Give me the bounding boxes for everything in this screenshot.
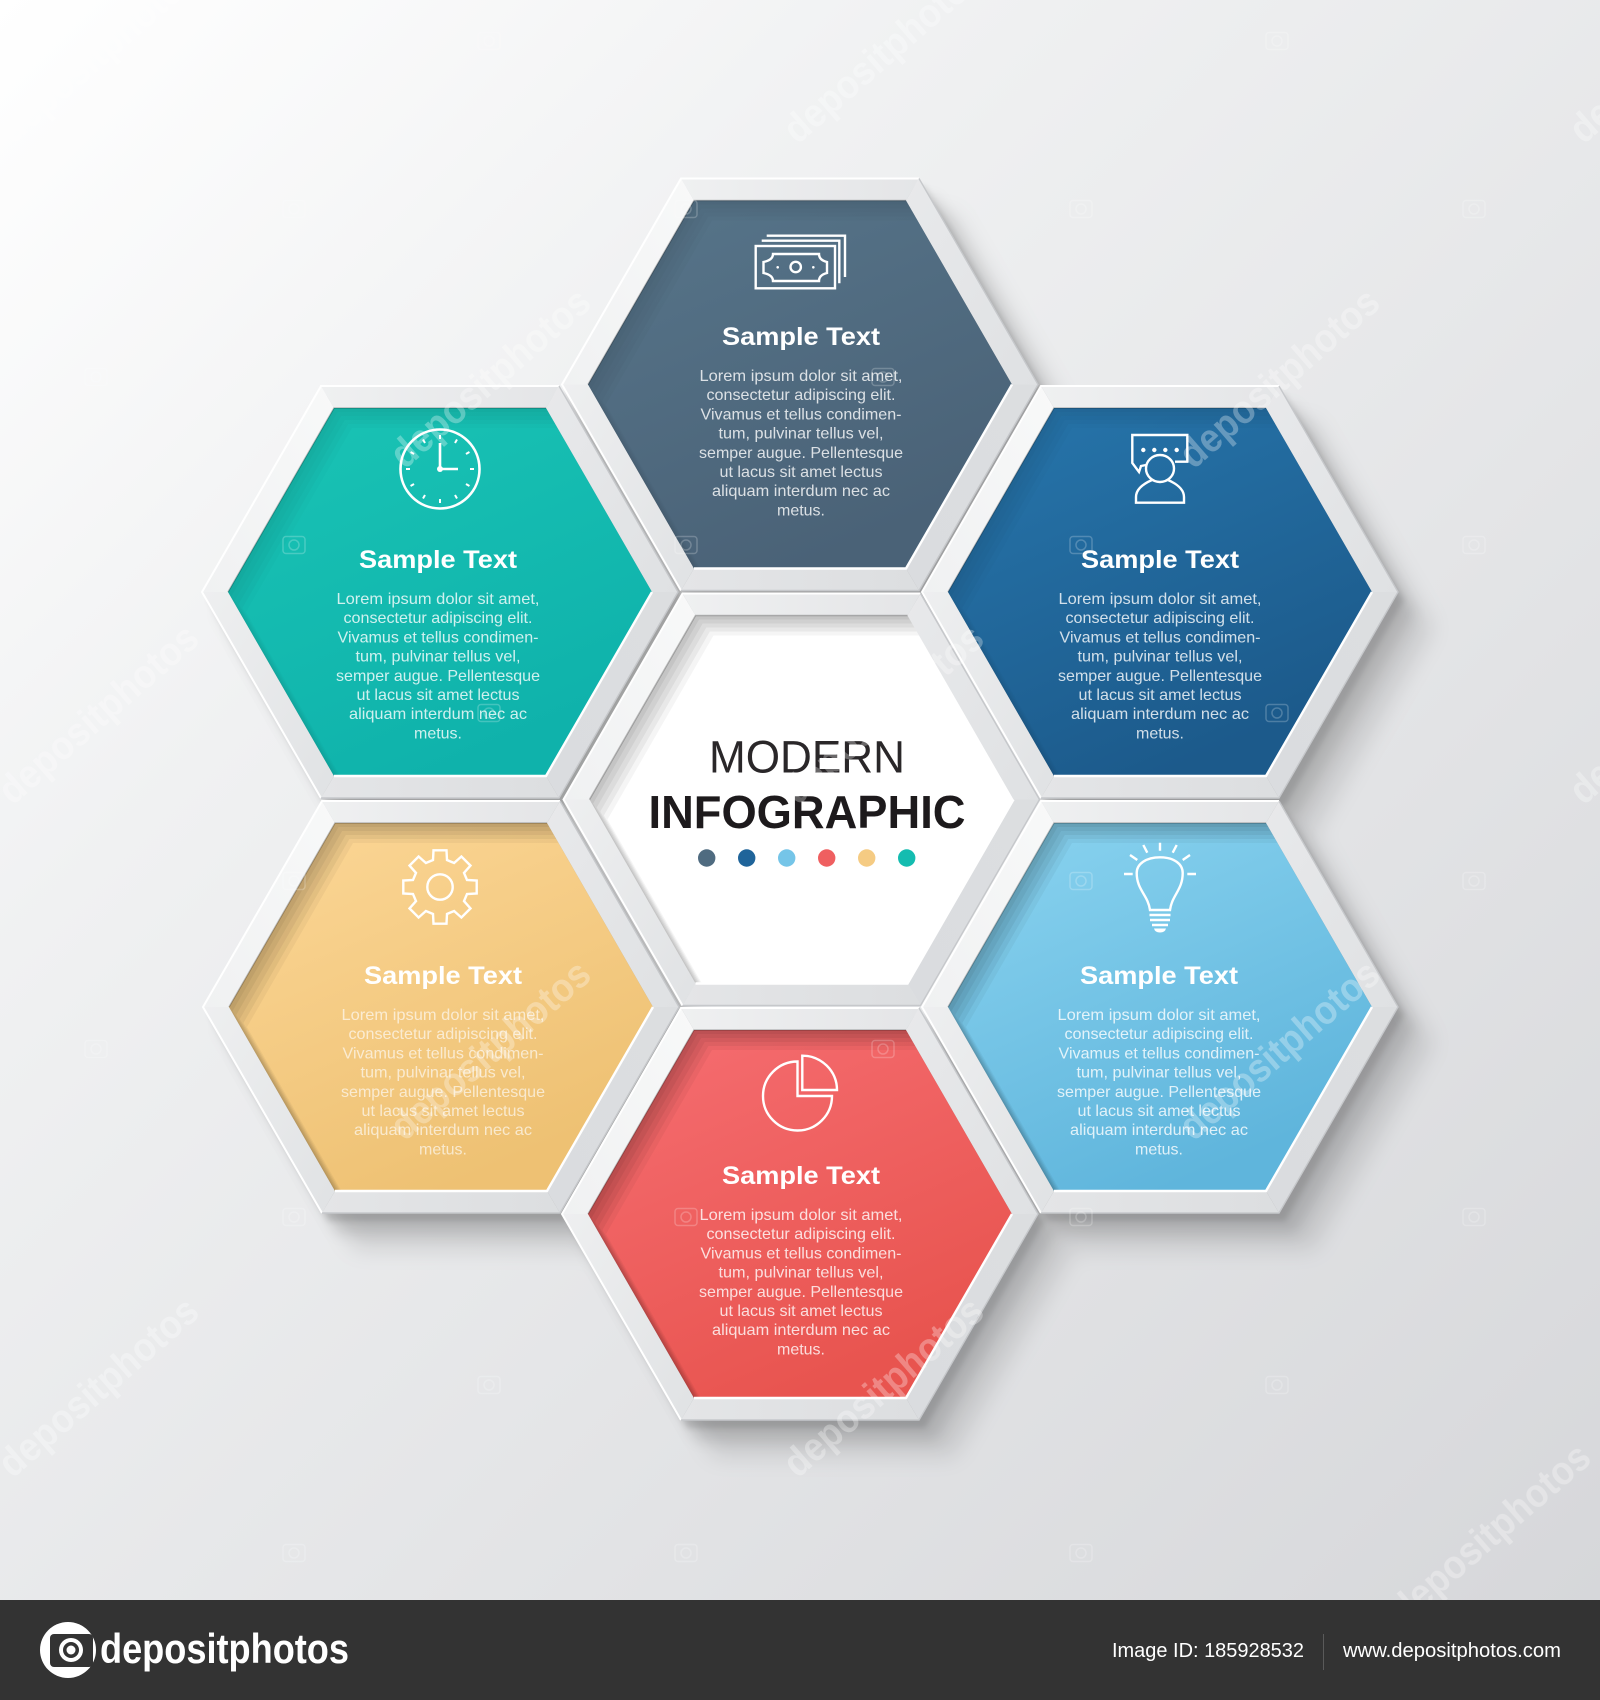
body text: tum, pulvinar tellus vel, xyxy=(718,1265,884,1282)
icon: logo camera xyxy=(40,1622,96,1678)
body text: semper augue. Pellentesque xyxy=(1058,668,1262,685)
body text: semper augue. Pellentesque xyxy=(699,1284,903,1301)
logo wordmark: depositphotos xyxy=(100,1625,349,1672)
body text: consectetur adipiscing elit. xyxy=(1064,1026,1254,1043)
website url: www.depositphotos.com xyxy=(1342,1640,1561,1662)
body text: tum, pulvinar tellus vel, xyxy=(1076,1065,1242,1082)
panel: left teal hexagon xyxy=(180,362,700,822)
heading: sample text: Sample Text xyxy=(722,1162,881,1190)
watermark overlay: depositphotos xyxy=(775,616,992,813)
image id: Image ID: 185928532 xyxy=(1112,1640,1304,1662)
body text: semper augue. Pellentesque xyxy=(699,445,903,462)
icon: gear xyxy=(403,850,477,924)
body text: consectetur adipiscing elit. xyxy=(706,1226,896,1243)
body text: ut lacus sit amet lectus xyxy=(1078,687,1242,704)
panel: center white hexagon xyxy=(542,570,1062,1030)
body text: metus. xyxy=(1136,725,1184,742)
body text: aliquam interdum nec ac xyxy=(354,1122,532,1139)
body text: Vivamus et tellus condimen- xyxy=(700,406,902,423)
panel: right blue hexagon xyxy=(900,362,1420,822)
footer bar xyxy=(0,1600,1600,1700)
watermark overlay: depositphotos xyxy=(382,280,599,477)
body text: ut lacus sit amet lectus xyxy=(720,1303,882,1320)
icon: clock xyxy=(400,430,480,508)
body text: consectetur adipiscing elit. xyxy=(344,610,532,627)
title: modern: MODERN xyxy=(709,732,905,783)
color dots legend xyxy=(698,849,915,867)
body text xyxy=(336,591,540,742)
body text: Vivamus et tellus condimen- xyxy=(338,629,538,646)
body text: tum, pulvinar tellus vel, xyxy=(1078,649,1242,666)
panel: top slate hexagon xyxy=(540,154,1060,614)
heading: sample text: Sample Text xyxy=(1081,546,1240,574)
body text: aliquam interdum nec ac xyxy=(1070,1122,1248,1139)
icon: pie chart xyxy=(763,1056,837,1130)
watermark overlay: depositphotos xyxy=(1171,280,1388,477)
icon: person with speech bubble xyxy=(1132,435,1187,503)
body text: Lorem ipsum dolor sit amet, xyxy=(1057,1007,1261,1024)
cast shadows behind hexagons xyxy=(208,186,1432,1456)
body text: consectetur adipiscing elit. xyxy=(706,387,896,404)
watermark overlay: depositphotos xyxy=(775,1289,992,1486)
heading: sample text: Sample Text xyxy=(1080,962,1239,990)
body text: Vivamus et tellus condimen- xyxy=(342,1045,544,1062)
body text: Vivamus et tellus condimen- xyxy=(700,1245,902,1262)
body text: tum, pulvinar tellus vel, xyxy=(360,1065,526,1082)
panel: bottom red hexagon xyxy=(540,984,1060,1444)
panel: lower left yellow hexagon xyxy=(181,777,701,1237)
icon: light bulb xyxy=(1124,843,1196,932)
body text: Lorem ipsum dolor sit amet, xyxy=(699,1207,903,1224)
body text: ut lacus sit amet lectus xyxy=(1078,1103,1240,1120)
body text xyxy=(1057,1007,1261,1158)
body text: metus. xyxy=(1135,1141,1183,1158)
body text: metus. xyxy=(777,502,825,519)
body text: semper augue. Pellentesque xyxy=(336,668,540,685)
heading: sample text: Sample Text xyxy=(364,962,523,990)
body text xyxy=(699,368,903,519)
body text xyxy=(341,1007,545,1158)
body text: aliquam interdum nec ac xyxy=(712,1322,890,1339)
body text: Vivamus et tellus condimen- xyxy=(1058,1045,1260,1062)
body text: ut lacus sit amet lectus xyxy=(720,464,882,481)
body text: aliquam interdum nec ac xyxy=(349,706,527,723)
body text: Vivamus et tellus condimen- xyxy=(1060,629,1260,646)
body text xyxy=(1058,591,1262,742)
watermark overlay: depositphotos xyxy=(1171,952,1388,1149)
body text: consectetur adipiscing elit. xyxy=(1066,610,1254,627)
body text: ut lacus sit amet lectus xyxy=(356,687,520,704)
body text: aliquam interdum nec ac xyxy=(712,483,890,500)
body text: metus. xyxy=(414,725,462,742)
body text: Lorem ipsum dolor sit amet, xyxy=(699,368,903,385)
icon: banknotes xyxy=(756,236,845,288)
title: infographic: INFOGRAPHIC xyxy=(648,786,966,838)
body text: semper augue. Pellentesque xyxy=(1057,1084,1261,1101)
heading: sample text: Sample Text xyxy=(722,323,881,351)
panel: lower right light blue hexagon xyxy=(900,777,1420,1237)
body text: ut lacus sit amet lectus xyxy=(362,1103,524,1120)
body text: metus. xyxy=(419,1141,467,1158)
heading: sample text: Sample Text xyxy=(359,546,518,574)
body text: semper augue. Pellentesque xyxy=(341,1084,545,1101)
body text xyxy=(699,1207,903,1358)
body text: Lorem ipsum dolor sit amet, xyxy=(1058,591,1262,608)
body text: Lorem ipsum dolor sit amet, xyxy=(341,1007,545,1024)
body text: metus. xyxy=(777,1341,825,1358)
watermark overlay: depositphotos xyxy=(382,952,599,1149)
body text: tum, pulvinar tellus vel, xyxy=(356,649,520,666)
body text: tum, pulvinar tellus vel, xyxy=(718,426,884,443)
body text: aliquam interdum nec ac xyxy=(1071,706,1249,723)
body text: Lorem ipsum dolor sit amet, xyxy=(336,591,540,608)
body text: consectetur adipiscing elit. xyxy=(348,1026,538,1043)
